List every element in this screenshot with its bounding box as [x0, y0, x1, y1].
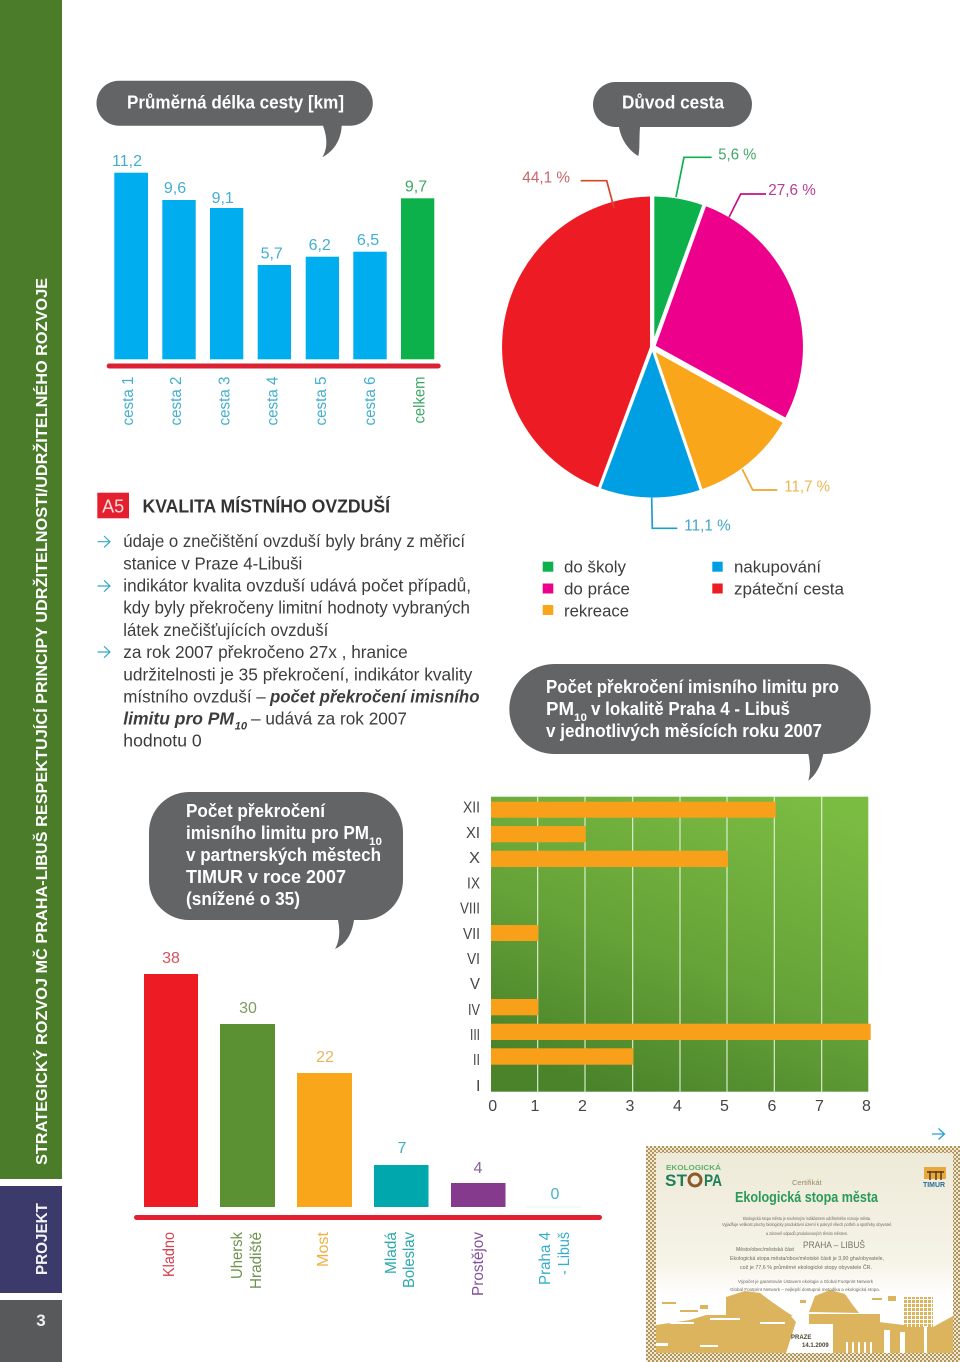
count axis labels: 4 — [673, 1098, 682, 1115]
callout: partner cities: 10 — [369, 836, 382, 848]
category labels: Kladno — [161, 1232, 178, 1277]
category labels: cesta 5 — [313, 376, 330, 426]
count axis labels: 0 — [488, 1098, 497, 1115]
callout: partner cities: (snížené o 35) — [186, 889, 300, 909]
callout: Praha 4 monthly exceedances: v lokalitě Praha 4 - Libuš — [591, 699, 790, 719]
certificate stamp text — [791, 1335, 829, 1349]
count axis labels: 2 — [578, 1098, 587, 1115]
sidebar: section title: STRATEGICKÝ ROZVOJ MČ PRAHA-LIBUŠ RESPEKTUJÍCÍ PRINCIPY UDRŽITELNOSTI/UDRŽITELNÉHO ROZVOJE — [33, 278, 51, 1165]
section heading: A5: A5 — [102, 496, 124, 516]
sidebar: page number — [0, 1300, 62, 1362]
certificate heading: Ekologická stopa města — [735, 1189, 879, 1206]
month labels: II — [473, 1052, 480, 1069]
month labels: VIII — [460, 900, 480, 918]
bullet text: indikátor kvalita ovzduší udává počet případů, — [123, 576, 471, 596]
logo: Timur: TIMUR — [923, 1180, 946, 1189]
category labels: cesta 1 — [120, 376, 137, 426]
logo: Ekologická stopa — [665, 1163, 722, 1190]
bullet text: udržitelnosti je 35 překročení, indikátor kvality — [123, 664, 473, 684]
values: 4 — [474, 1160, 483, 1177]
month labels: IX — [467, 876, 480, 892]
callout: partner cities: TIMUR v roce 2007 — [186, 867, 346, 887]
values: 9,1 — [212, 190, 234, 207]
category labels: Mladá — [383, 1232, 400, 1274]
count axis labels: 5 — [720, 1098, 729, 1115]
leader lines — [581, 157, 777, 528]
category labels: Most — [315, 1231, 332, 1267]
horizontal bar chart: monthly exceedances — [460, 797, 871, 1115]
callout: partner cities: Počet překročení — [186, 801, 326, 821]
pie legend — [543, 558, 845, 620]
count axis labels: 7 — [815, 1098, 824, 1115]
percentage labels: 44,1 % — [522, 169, 570, 186]
certificate body text: PRAHA – LIBUŠ — [803, 1240, 865, 1250]
values: 30 — [239, 1000, 257, 1017]
callout: Praha 4 monthly exceedances: 10 — [574, 712, 587, 724]
logo: Ekologická stopa: EKOLOGICKÁ — [666, 1163, 722, 1172]
bullet text: látek znečišťujících ovzduší — [123, 620, 328, 640]
month labels: I — [476, 1078, 480, 1095]
legend: recreation: rekreace — [564, 602, 629, 620]
values — [112, 153, 427, 263]
certificate heading: Certifikát — [792, 1178, 823, 1187]
month labels: X — [469, 850, 480, 867]
month labels: VI — [467, 951, 480, 968]
category labels — [161, 1231, 573, 1296]
logo: Timur — [923, 1167, 946, 1189]
slice: shopping — [601, 352, 700, 498]
count axis labels: 1 — [531, 1098, 540, 1115]
bar: total — [401, 198, 434, 359]
certificate image — [646, 1146, 960, 1362]
section heading: A5 — [97, 493, 391, 518]
values: 0 — [551, 1186, 560, 1203]
count axis labels: 3 — [626, 1098, 635, 1115]
callout: partner cities: v partnerských městech — [186, 845, 381, 865]
callout: trip purpose — [593, 82, 752, 156]
month labels: XII — [463, 800, 480, 816]
sidebar: page number: 3 — [36, 1311, 46, 1330]
arrow: next — [932, 1128, 944, 1140]
legend: shopping: nakupování — [734, 558, 821, 576]
skyline flecks — [662, 1296, 896, 1312]
slice: return trip — [502, 197, 650, 487]
certificate body text: Výpočet je garantován Ústavem ekologie a Global Footprint Network — [738, 1278, 874, 1284]
month bars — [491, 802, 871, 1065]
percentage labels: 27,6 % — [768, 182, 816, 199]
pie chart: trip purpose — [502, 146, 830, 535]
slice: to school — [654, 196, 702, 337]
category labels: Boleslav — [401, 1232, 418, 1288]
plot background — [491, 797, 868, 1092]
bullet text: hodnotu 0 — [123, 730, 202, 750]
certificate body text: Vyjadřuje velikost plochy biologicky produktivní území k pokrytí všech potřeb a spotřeby obyvatel. — [722, 1222, 892, 1227]
category labels: cesta 4 — [265, 376, 282, 426]
category labels: - Libuš — [556, 1232, 573, 1275]
callout: average trip length: Průměrná délka cesty [km] — [127, 92, 344, 112]
logo: Ekologická stopa: ST — [665, 1171, 688, 1190]
slice: to work — [656, 206, 803, 418]
slice: recreation — [656, 352, 783, 489]
month labels — [460, 800, 480, 1095]
percentage labels: 11,1 % — [684, 518, 731, 535]
bullet text: údaje o znečištění ovzduší byly brány z měřicí — [123, 531, 465, 551]
category labels — [120, 376, 428, 426]
month labels: VII — [463, 926, 480, 943]
bars: trips — [114, 173, 387, 359]
values: 5,7 — [261, 246, 283, 263]
bullet text: – udává za rok 2007 — [251, 708, 407, 728]
values: 6,2 — [309, 237, 331, 254]
axis line — [107, 364, 441, 368]
values: 9,6 — [164, 180, 186, 197]
certificate body text — [722, 1216, 892, 1292]
callout: trip purpose: Důvod cesta — [622, 92, 725, 112]
percentage labels: 11,7 % — [784, 479, 830, 496]
certificate heading — [735, 1178, 879, 1206]
values: 38 — [162, 950, 180, 967]
bullet text: počet překročení imisního — [269, 686, 480, 706]
logo: Ekologická stopa: PA — [704, 1171, 722, 1190]
legend: to school: do školy — [564, 558, 626, 576]
section heading: A5: KVALITA MÍSTNÍHO OVZDUŠÍ — [142, 496, 391, 516]
bar chart: partner cities — [134, 950, 602, 1296]
bullet text: za rok 2007 překročeno 27x , hranice — [123, 642, 408, 662]
callout: Praha 4 monthly exceedances: PM — [546, 699, 574, 719]
values: 22 — [316, 1049, 334, 1066]
values — [162, 950, 560, 1203]
callout: Praha 4 monthly exceedances: Počet překročení imisního limitu pro — [546, 677, 839, 697]
category labels: cesta 3 — [216, 377, 233, 426]
category labels: cesta 6 — [362, 376, 379, 426]
percentage labels: 5,6 % — [718, 146, 756, 163]
category labels: celkem — [411, 376, 428, 424]
callout: Praha 4 monthly exceedances: v jednotlivých měsících roku 2007 — [546, 721, 822, 741]
category labels: Prostějov — [470, 1232, 487, 1296]
values: 7 — [398, 1140, 407, 1157]
certificate body text: Ekologická stopa města/obce/městské části je 3,90 gha/obyvatele, — [730, 1256, 884, 1262]
percentage labels — [522, 146, 830, 535]
axis line — [134, 1215, 602, 1220]
bullet text: kdy byly překročeny limitní hodnoty vybraných — [123, 598, 470, 618]
certificate stamp text: PRAZE — [791, 1335, 811, 1341]
count axis labels — [488, 1098, 871, 1115]
bullet text: místního ovzduší – — [123, 686, 266, 706]
callout: partner cities: imisního limitu pro PM — [186, 823, 369, 843]
certificate body text: Global Footprint Network – nejlepší dostupná metodika a ekologická stopa. — [730, 1287, 880, 1292]
month labels: III — [470, 1027, 480, 1044]
values: 11,2 — [112, 153, 142, 170]
category labels: Hradiště — [248, 1232, 265, 1289]
values: 6,5 — [357, 232, 379, 249]
month labels: V — [470, 976, 480, 993]
bullet text: stanice v Praze 4-Libuši — [123, 553, 302, 573]
certificate body text: Město/obec/městská část — [736, 1247, 794, 1253]
callout: Praha 4 monthly exceedances — [509, 664, 871, 781]
sidebar: projekt tab — [0, 1186, 62, 1293]
certificate stamp text: 14.1.2009 — [802, 1343, 829, 1349]
skyline — [656, 1290, 953, 1353]
callout: partner cities — [149, 792, 403, 949]
callout: average trip length — [96, 81, 373, 157]
skyline gaps — [656, 1318, 927, 1353]
bullet text: limitu pro PM — [123, 708, 234, 728]
certificate body text: což je 77,6 % průměrné ekologické stopy obyvatele ČR. — [740, 1264, 872, 1271]
category labels: Uhersk — [229, 1231, 246, 1279]
sidebar: projekt tab: PROJEKT — [34, 1203, 51, 1275]
category labels: Praha 4 — [537, 1232, 554, 1285]
bars — [144, 974, 581, 1208]
arrow bullets — [98, 536, 110, 658]
month labels: IV — [468, 1002, 480, 1019]
month labels: XI — [466, 825, 480, 842]
bullet text: 10 — [235, 720, 248, 732]
sidebar: section title — [0, 0, 62, 1179]
category labels: cesta 2 — [168, 376, 185, 426]
certificate body text: a zároveň odpadů produkovaných těmito městem. — [766, 1230, 848, 1236]
certificate paper — [656, 1153, 953, 1353]
certificate border — [646, 1146, 960, 1362]
count axis labels: 6 — [768, 1098, 777, 1115]
legend: return trip: zpáteční cesta — [734, 580, 845, 598]
legend: to work: do práce — [564, 580, 630, 598]
bar chart: average trip length — [107, 153, 441, 426]
count axis labels: 8 — [862, 1098, 871, 1115]
text block: bullet list — [98, 531, 480, 750]
values: 9,7 — [405, 179, 427, 196]
grid lines — [538, 797, 822, 1092]
certificate body text: Ekologická stopa města je souhrnným indikátorem udržitelného rozvoje města. — [743, 1216, 871, 1221]
bullet text — [123, 531, 480, 750]
